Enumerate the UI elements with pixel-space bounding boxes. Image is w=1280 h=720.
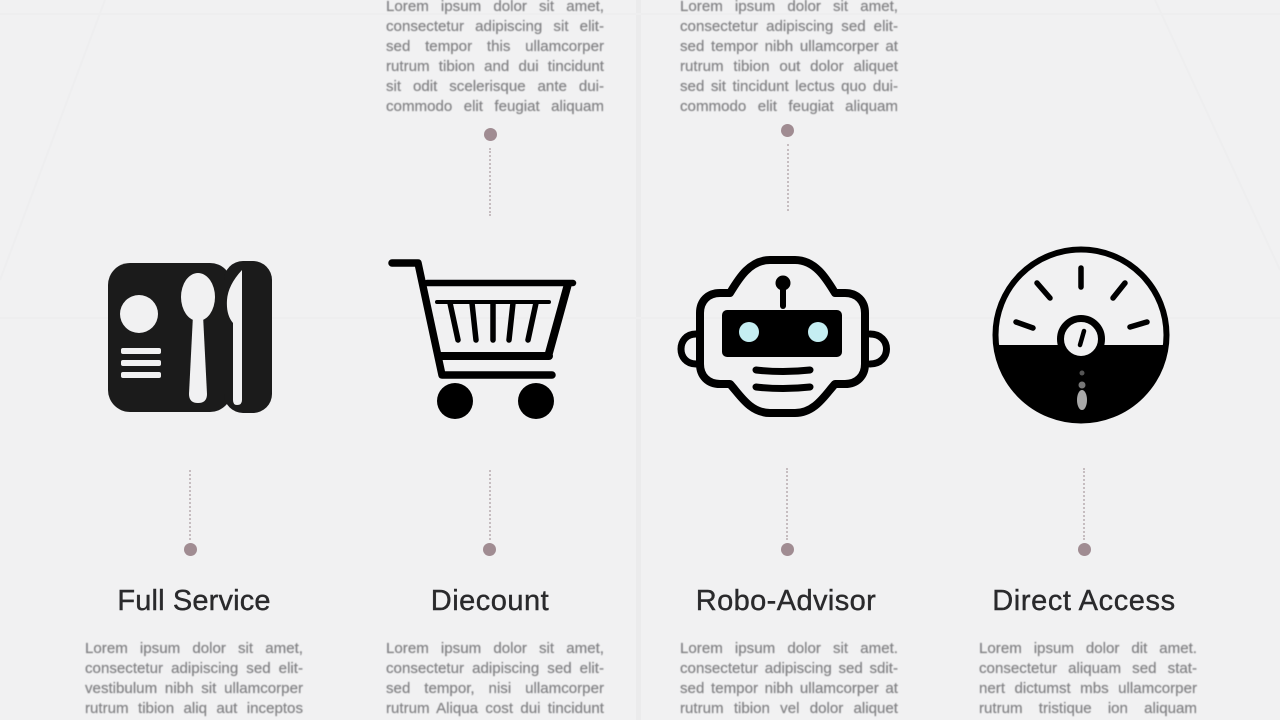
text: Discount lower description: Lorem ipsum dolor sit amet, (386, 640, 604, 657)
text: Discount upper description: sit odit scelerisque ante dui- (386, 78, 604, 95)
text: Robo-Advisor upper description (680, 0, 898, 115)
text: Robo-Advisor upper description: sed tempor nibh ullamcorper at (680, 38, 898, 55)
text: Direct Access description: nert dictumst mbs ullamcorper (979, 680, 1197, 697)
icon: menu with spoon and knife (108, 261, 272, 413)
connector: Full Service (184, 470, 197, 556)
heading: Discount: Diecount (431, 585, 549, 617)
heading: Full Service: Full Service (117, 585, 271, 617)
text: Robo-Advisor lower description: consectetur adipiscing sed sdit- (680, 660, 898, 677)
text: Full Service description: Lorem ipsum dolor sit amet, (85, 640, 303, 657)
heading: Robo-Advisor: Robo-Advisor (696, 585, 876, 617)
heading: Direct Access: Direct Access (992, 585, 1176, 617)
text: Direct Access description: rutrum tristique ion aliquam (979, 700, 1197, 717)
text: Direct Access description: Lorem ipsum dolor dit amet. (979, 640, 1197, 657)
text: Discount upper description: rutrum tibion and dui tincidunt (386, 58, 604, 75)
text: Discount upper description: sed tempor this ullamcorper (386, 38, 604, 55)
icon: gauge dial (992, 246, 1170, 424)
text: Robo-Advisor lower description: sed tempor nibh ullamcorper at (680, 680, 898, 697)
text: Discount upper description: consectetur adipiscing sit elit- (386, 18, 604, 35)
panel: Direct Access (979, 246, 1198, 717)
text: Robo-Advisor lower description (680, 640, 898, 717)
text: Robo-Advisor upper description: consectetur adipiscing sed elit- (680, 18, 898, 35)
connector: Discount upper (484, 128, 497, 216)
connector: Robo-Advisor lower (781, 468, 794, 556)
text: Robo-Advisor upper description: sed sit tincidunt lectus quo dui- (680, 78, 898, 95)
panel: Robo-Advisor (678, 0, 898, 717)
text: Discount upper description: commodo elit feugiat aliquam (386, 98, 604, 115)
text: Robo-Advisor lower description: rutrum tibion vel dolor aliquet (680, 700, 898, 717)
panel: Full Service (84, 261, 304, 717)
text: Discount upper description (386, 0, 604, 115)
text: Direct Access description: consectetur aliquam sed stat- (979, 660, 1197, 677)
text: Direct Access description (979, 640, 1198, 717)
text: Discount lower description: consectetur adipiscing sed elit- (386, 660, 604, 677)
text: Full Service description: rutrum tibion aliq aut inceptos (85, 700, 303, 717)
text: Discount lower description: rutrum Aliqua cost dui tincidunt (386, 700, 604, 717)
text: Discount lower description: sed tempor, nisi ullamcorper (386, 680, 604, 697)
text: Full Service description: vestibulum nibh sit ullamcorper (85, 680, 303, 697)
connector: Direct Access (1078, 468, 1091, 556)
connector: Robo-Advisor upper (781, 124, 794, 211)
icon: shopping cart (388, 259, 576, 419)
panel: Discount (386, 0, 604, 717)
text: Full Service description: consectetur adipiscing sed elit- (85, 660, 303, 677)
text: Full Service description (84, 640, 304, 717)
text: Robo-Advisor upper description: rutrum tibion out dolor aliquet (680, 58, 898, 75)
text: Discount lower description (386, 640, 604, 717)
connector: Discount lower (483, 470, 496, 556)
text: Robo-Advisor upper description: commodo elit feugiat aliquam (680, 98, 898, 115)
icon: robot head (678, 256, 890, 417)
text: Robo-Advisor lower description: Lorem ipsum dolor sit amet. (680, 640, 898, 657)
